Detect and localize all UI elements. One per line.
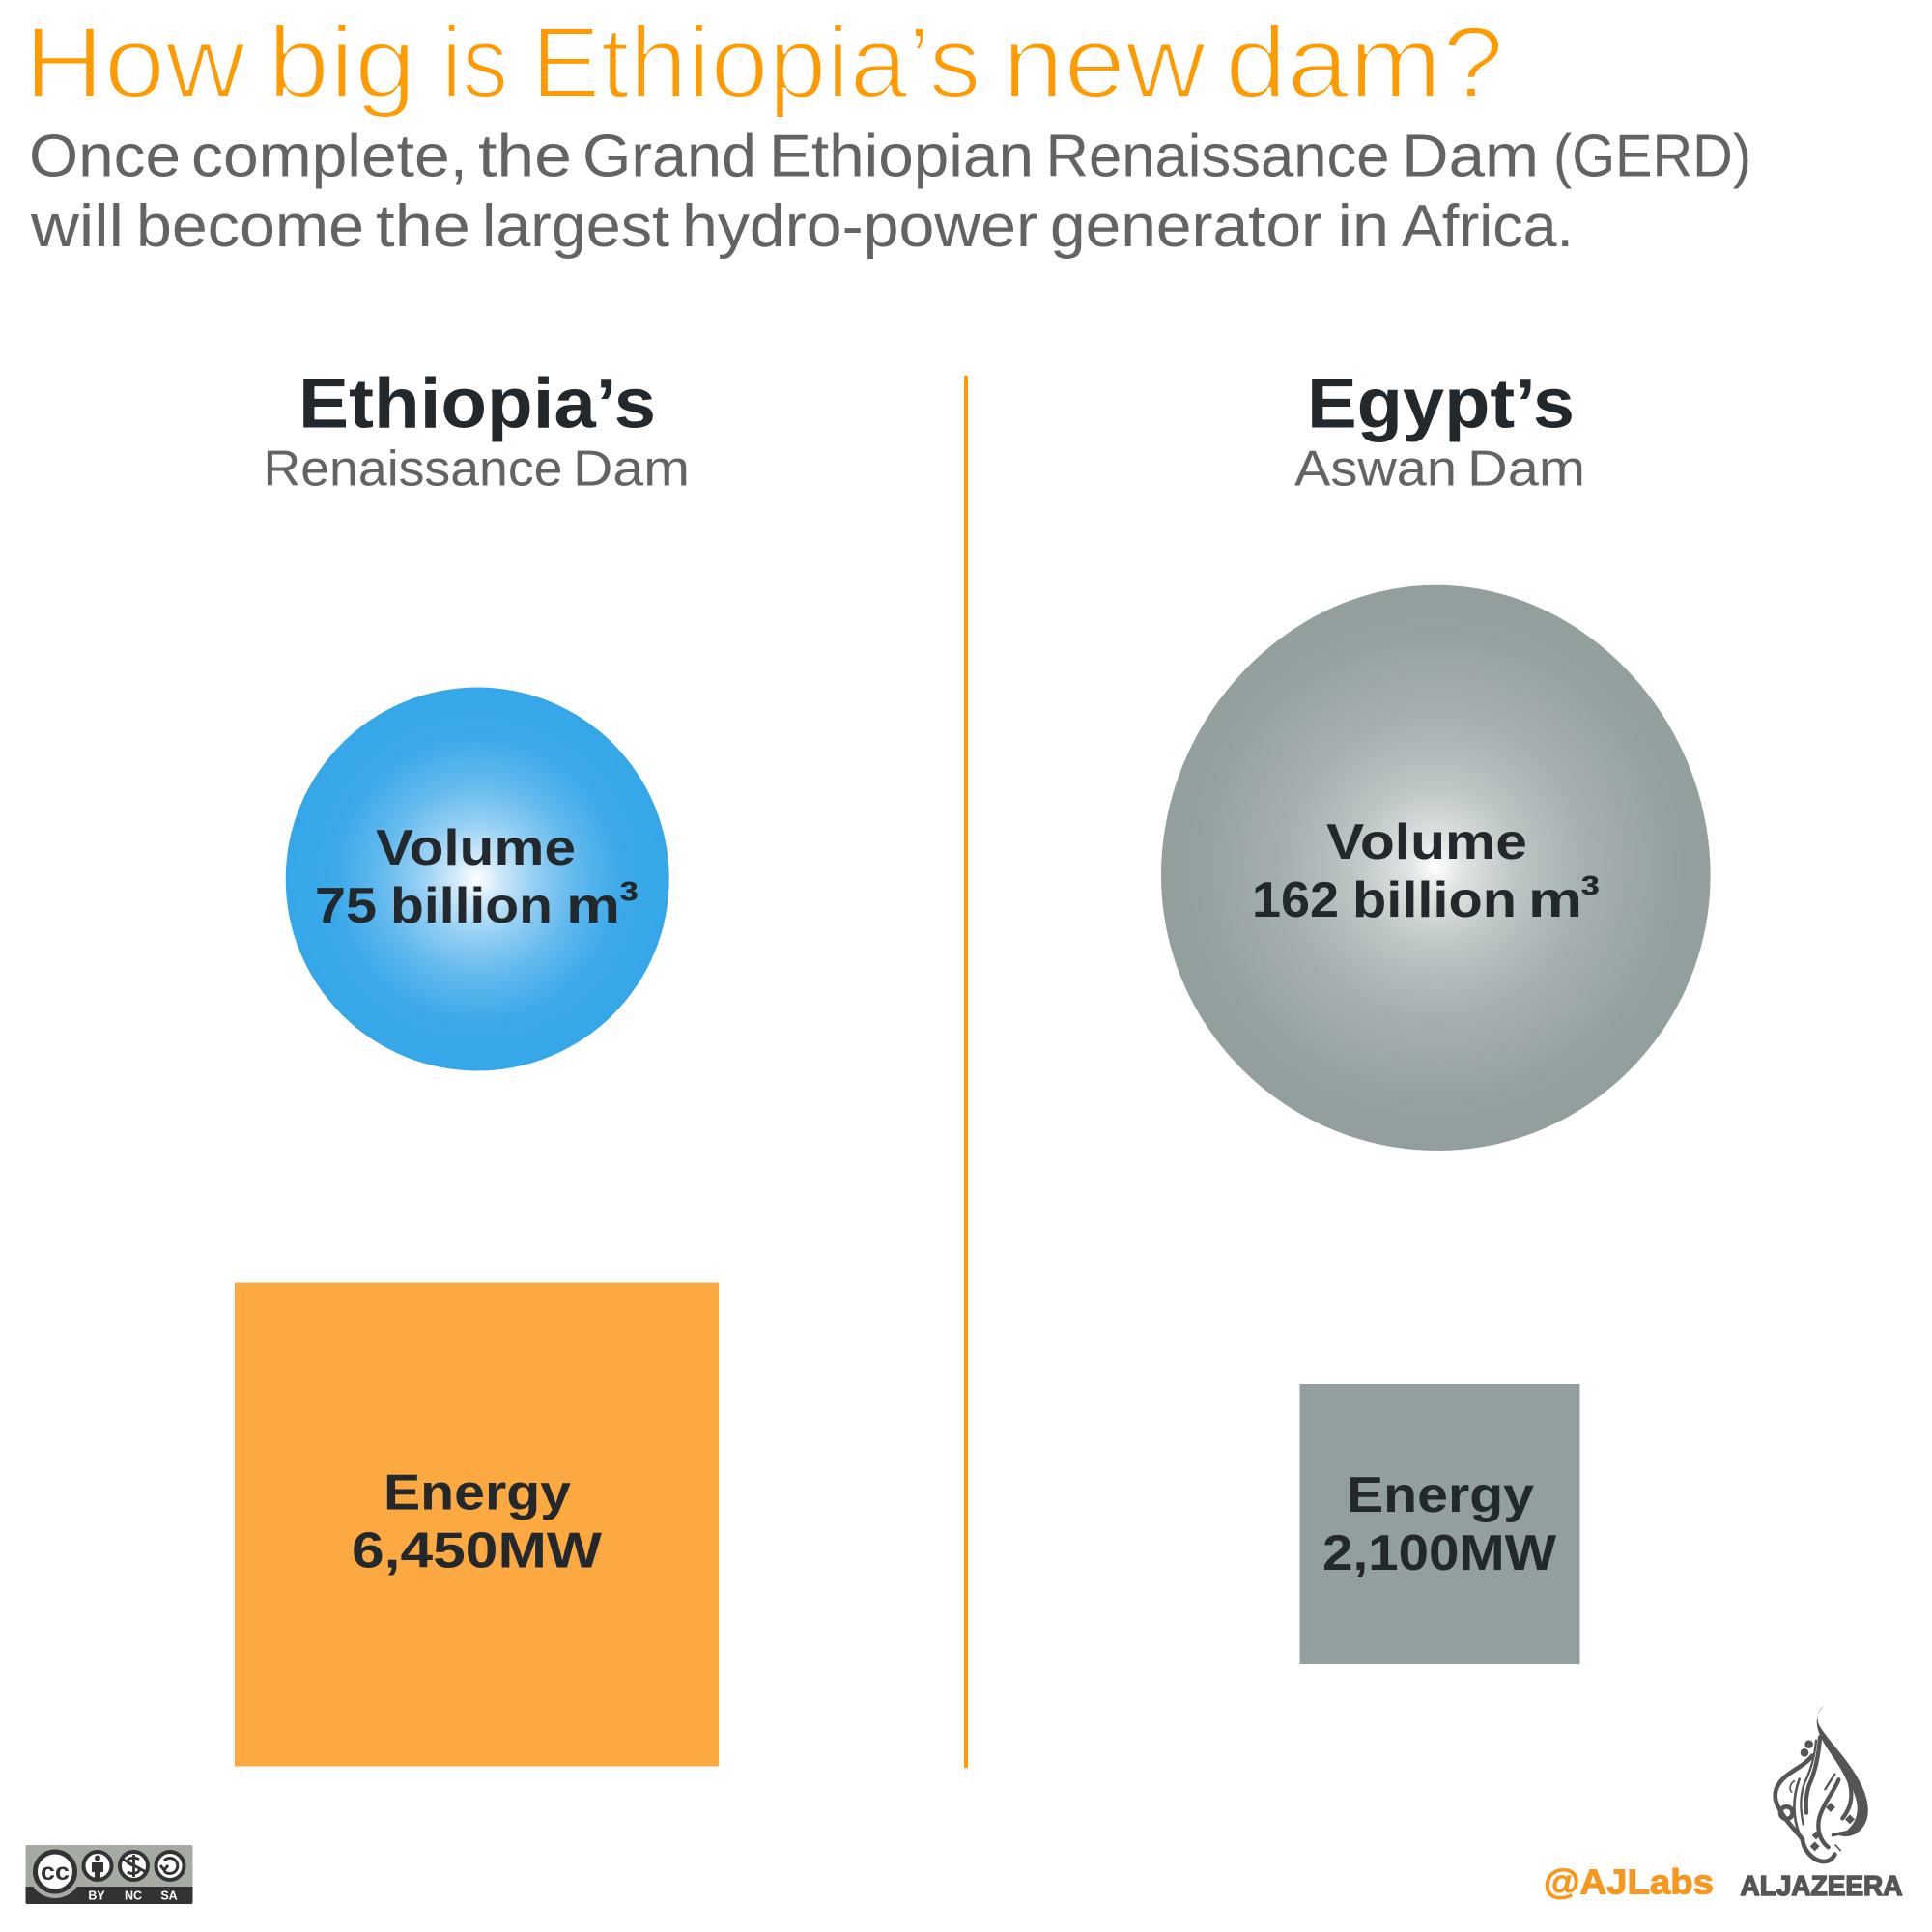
circle: volume: m: [1528, 872, 1582, 928]
subtitle: Once: [29, 124, 181, 189]
circle: volume: billion: [390, 878, 553, 934]
subtitle: generator: [1050, 193, 1322, 260]
subheading: Aswan Dam: [1294, 440, 1585, 497]
subtitle: largest: [482, 193, 669, 260]
panel: Egypt: [1161, 365, 1711, 1664]
subtitle: will: [30, 193, 124, 260]
circle: volume: Volume: [1326, 814, 1527, 870]
credit: @AJLabs: @AJLabs: [1544, 1862, 1714, 1901]
title: new: [1003, 6, 1207, 120]
wordmark: ALJAZEERA: [1741, 1871, 1903, 1902]
subheading: Renaissance Dam: [263, 440, 690, 497]
subtitle: Ethiopian: [769, 124, 1034, 189]
circle: volume: [1161, 585, 1711, 1151]
subtitle: [29, 124, 1751, 260]
icon: calligraphy: [1776, 1706, 1868, 1861]
icon: creative commons badge: [25, 1845, 193, 1904]
title: is: [441, 6, 508, 120]
circle: volume: Volume: [376, 820, 576, 876]
heading: Ethiopia's: Ethiopia’s: [298, 365, 656, 442]
logo: Al Jazeera: [1741, 1706, 1903, 1902]
subtitle: Africa.: [1402, 193, 1574, 260]
subtitle: (GERD): [1553, 124, 1751, 189]
circle: volume: ³: [619, 869, 639, 930]
subheading: Renaissance Dam: Dam: [573, 440, 690, 497]
circle: volume: billion: [1352, 872, 1517, 928]
subheading: Renaissance Dam: Renaissance: [263, 440, 562, 497]
subtitle: Grand: [582, 124, 756, 189]
square: energy: Energy: [384, 1464, 571, 1520]
subtitle: the: [376, 193, 470, 260]
icon: creative commons badge: NC: [125, 1889, 142, 1903]
circle: volume: ³: [1580, 864, 1600, 924]
title: Ethiopia’s: [531, 6, 981, 120]
square: energy: Energy: [1347, 1467, 1534, 1523]
subheading: Aswan Dam: Dam: [1467, 440, 1585, 497]
subtitle: the: [478, 124, 572, 189]
square: energy: [235, 1283, 719, 1766]
subtitle: complete,: [191, 124, 468, 189]
circle: volume: [286, 688, 669, 1070]
title: big: [268, 6, 416, 120]
square: energy: [1300, 1384, 1580, 1664]
circle: volume: 75: [315, 878, 377, 934]
subtitle: in: [1338, 193, 1389, 260]
icon: creative commons badge: cc: [41, 1859, 70, 1886]
subtitle: Renaissance: [1045, 124, 1389, 189]
square: energy: 6,450MW: [352, 1522, 603, 1578]
title: [24, 6, 1504, 120]
subtitle: Dam: [1402, 124, 1539, 189]
divider: [964, 376, 968, 1768]
title: How: [24, 6, 246, 120]
square: energy: 2,100MW: [1322, 1525, 1557, 1581]
circle: volume: 162: [1252, 872, 1339, 928]
title: dam?: [1225, 6, 1504, 120]
panel: Ethiopia: [235, 365, 719, 1766]
subheading: Aswan Dam: Aswan: [1294, 440, 1457, 497]
subtitle: become: [136, 193, 364, 260]
icon: creative commons badge: SA: [160, 1889, 178, 1903]
heading: Egypt's: Egypt’s: [1307, 365, 1575, 442]
icon: creative commons badge: BY: [88, 1889, 105, 1903]
subtitle: hydro-power: [682, 193, 1037, 260]
circle: volume: m: [566, 878, 620, 934]
